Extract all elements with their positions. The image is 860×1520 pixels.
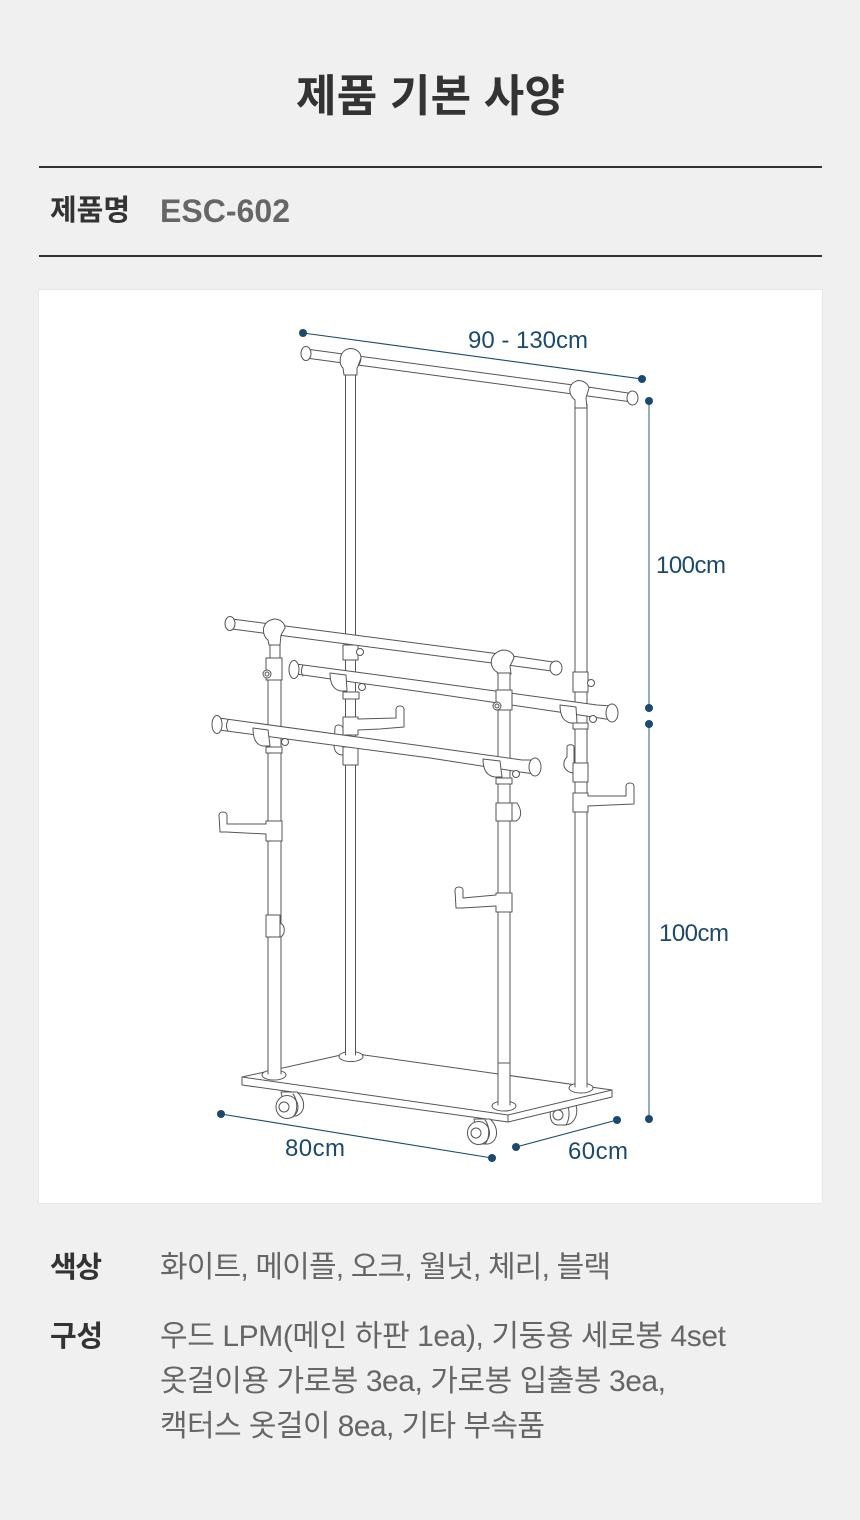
dimension: upper height <box>645 397 726 712</box>
diagram: middle hanger bar <box>289 660 618 729</box>
diagram: back caster <box>550 1105 577 1125</box>
dimension: depth 60cm <box>512 1116 628 1165</box>
dimension: top width: 90 - 130cm <box>468 327 588 354</box>
composition spec row: 캑터스 옷걸이 8ea, 기타 부속품 <box>160 1410 545 1443</box>
diagram: back frame poles <box>346 372 587 1088</box>
composition spec row: 우드 LPM(메인 하판 1ea), 기둥용 세로봉 4set <box>160 1320 727 1353</box>
diagram: back pole fittings and hooks <box>334 645 634 812</box>
product name label: 제품명 <box>50 194 130 227</box>
colour spec row: 화이트, 메이플, 오크, 월넛, 체리, 블랙 <box>160 1251 611 1284</box>
dimension: width 80cm: 80cm <box>285 1135 345 1162</box>
diagram: lower hanger bar <box>212 716 541 784</box>
diagram: front pole fittings and hooks <box>219 803 521 937</box>
diagram: base board <box>242 1040 612 1122</box>
diagram: top hanger bar <box>301 346 638 408</box>
product name value: ESC-602 <box>160 193 290 229</box>
product name row <box>39 167 822 256</box>
diagram: front poles <box>263 645 512 1106</box>
colour spec row: 색상 <box>50 1251 102 1284</box>
composition spec row: 옷걸이용 가로봉 3ea, 가로봉 입출봉 3ea, <box>160 1365 666 1398</box>
title: 제품 기본 사양 <box>296 72 565 121</box>
dimension: top width <box>299 327 646 383</box>
diagram: front casters <box>276 1092 497 1144</box>
dimension: lower height <box>645 720 729 1123</box>
composition spec row: 구성 <box>50 1320 103 1353</box>
diagram: front upper hanger bar <box>225 616 562 675</box>
composition spec row <box>50 1320 727 1443</box>
dimension: width 80cm <box>217 1110 496 1162</box>
panel: product diagram <box>38 290 822 1204</box>
dimension: upper height: 100cm <box>656 552 726 579</box>
dimension: depth 60cm: 60cm <box>568 1138 628 1165</box>
dimension: lower height: 100cm <box>659 920 729 947</box>
